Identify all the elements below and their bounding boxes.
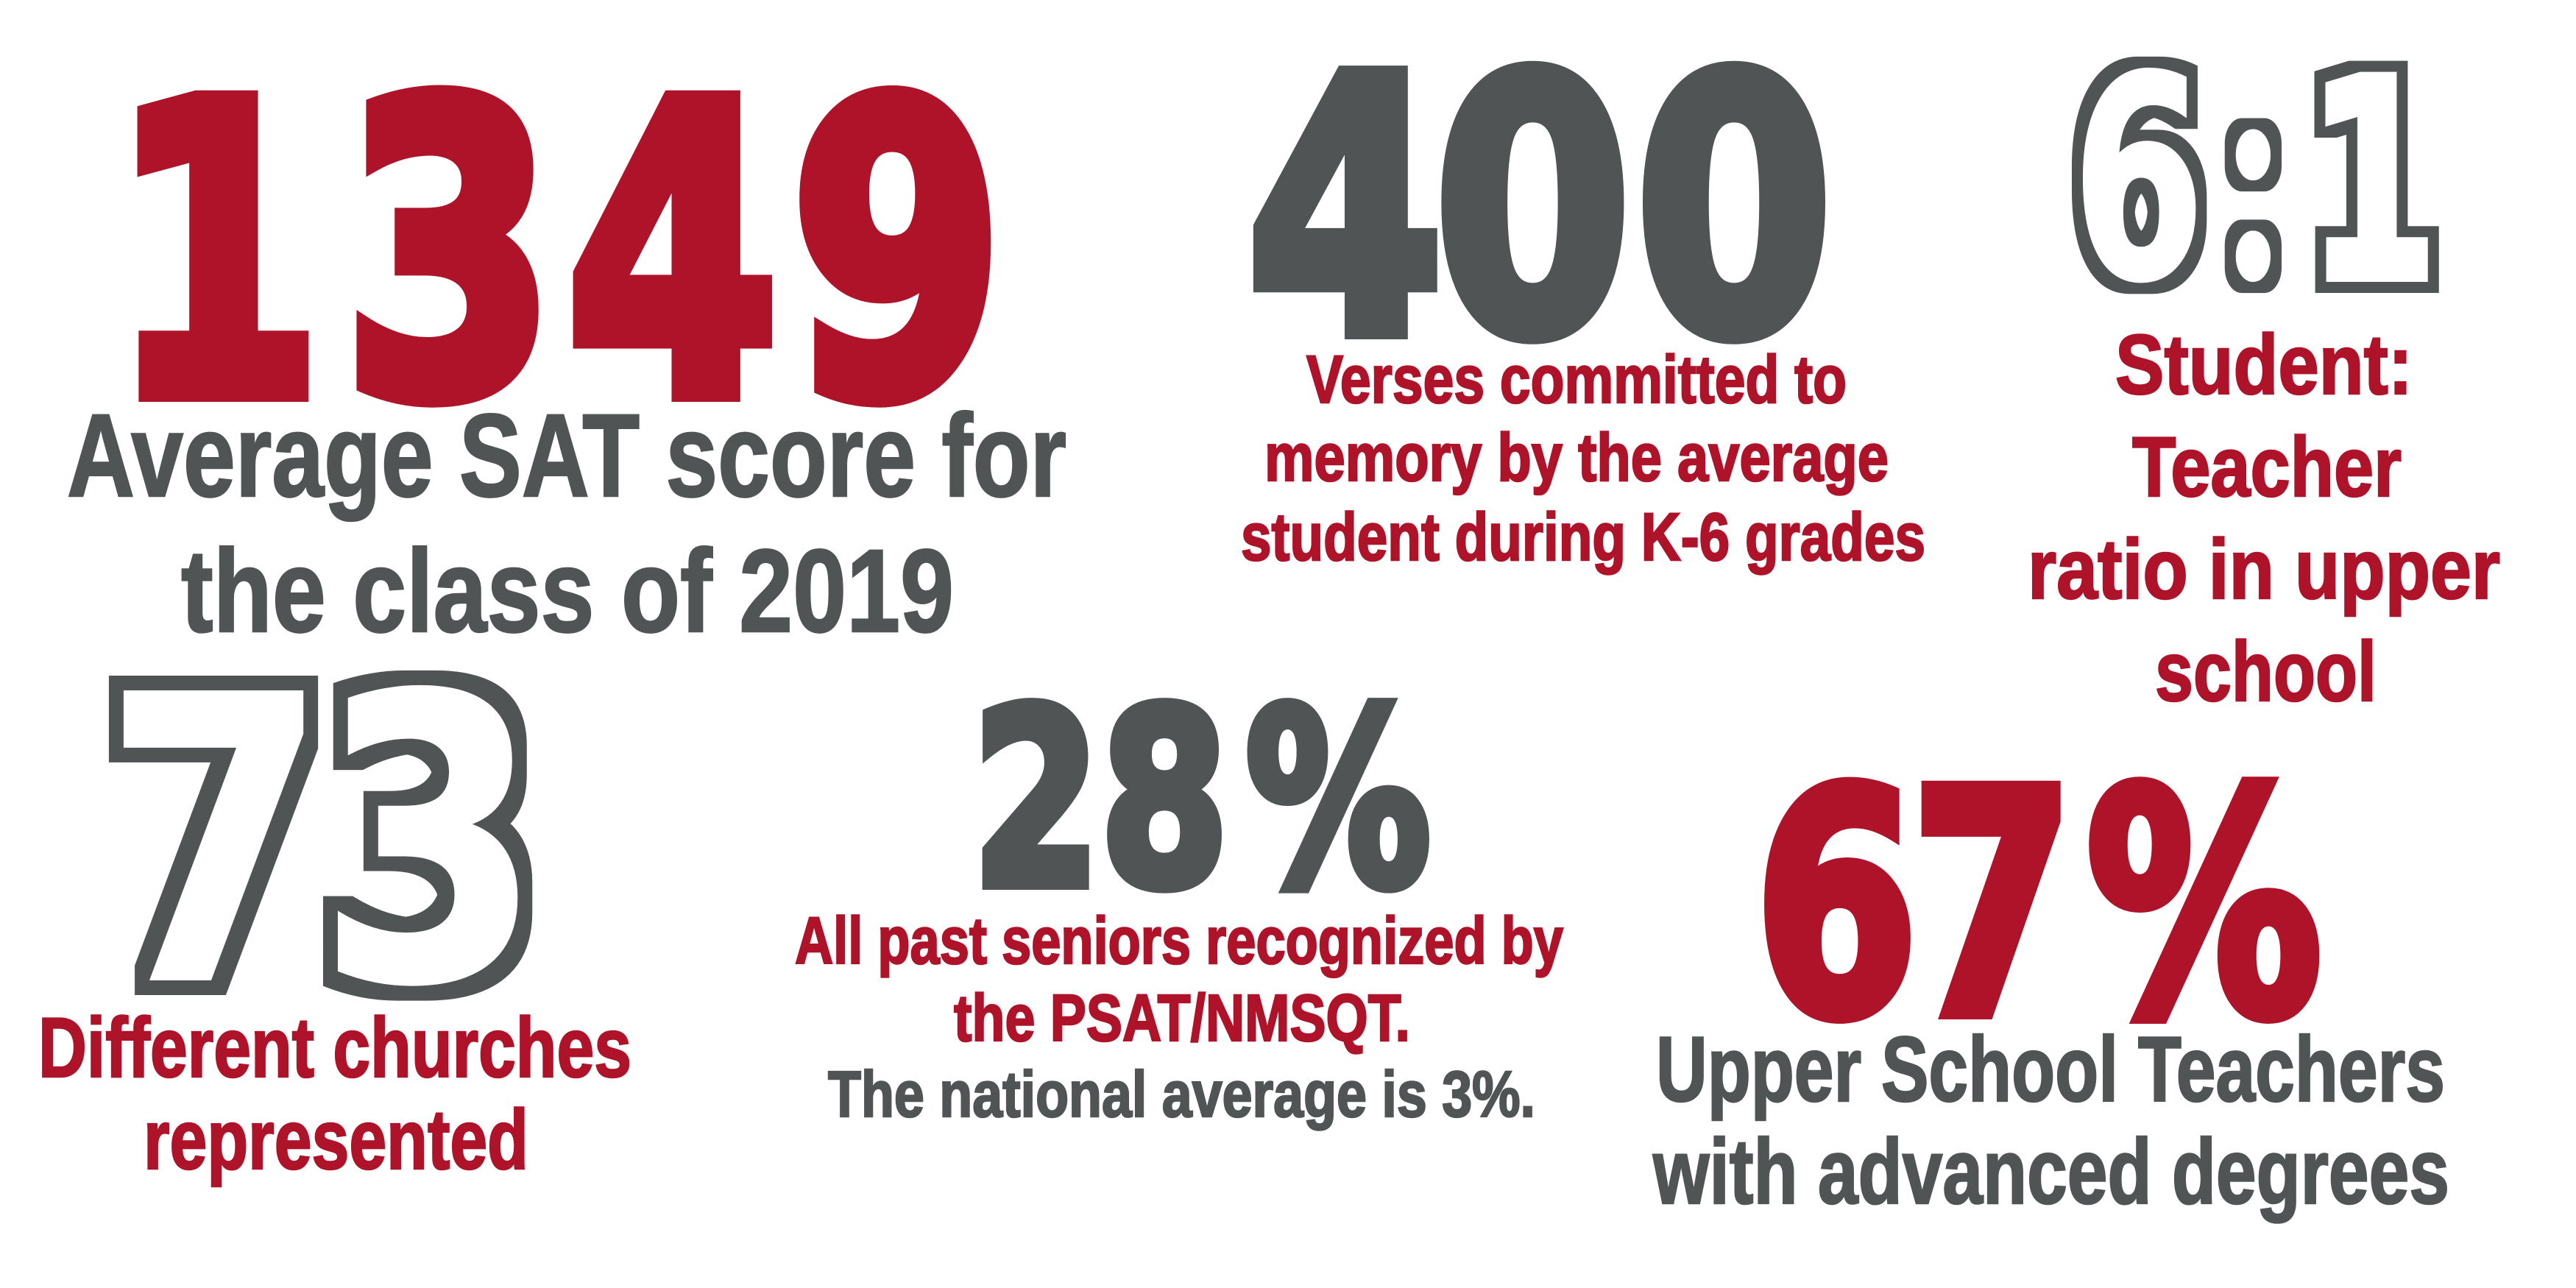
caption: student teacher ratio: Student:	[2115, 318, 2413, 412]
caption: PSAT seniors: The national average is 3%.	[828, 1058, 1535, 1130]
big outlined number: 73: 73	[103, 615, 542, 1072]
caption: verses committed to memory: student during K-6 grades	[1241, 500, 1925, 575]
panel: student teacher ratio	[2028, 0, 2500, 719]
caption: verses committed to memory	[1241, 342, 1925, 575]
panel: teachers with advanced degrees	[1652, 726, 2449, 1223]
caption: different churches	[38, 1001, 631, 1187]
panel: SAT score	[67, 21, 1066, 657]
caption: PSAT seniors	[795, 905, 1563, 1130]
panel: verses memorized	[1241, 4, 1925, 575]
big outlined number: 6:1: 6:1	[2072, 0, 2438, 347]
caption: verses committed to memory: Verses committed to	[1306, 342, 1847, 417]
caption: average SAT score	[67, 389, 1066, 657]
caption: different churches: Different churches	[38, 1001, 631, 1095]
caption: PSAT seniors: the PSAT/NMSQT.	[954, 982, 1410, 1055]
big number: 28%: 28%	[972, 659, 1431, 942]
caption: upper school teachers	[1652, 1019, 2449, 1223]
caption: student teacher ratio	[2028, 318, 2500, 719]
caption: PSAT seniors: All past seniors recognized by	[795, 905, 1563, 978]
caption: student teacher ratio: ratio in upper	[2028, 523, 2500, 617]
big number: 67%: 67%	[1755, 726, 2322, 1086]
big number: 1349: 1349	[110, 21, 1003, 487]
panel: PSAT recognition	[795, 659, 1563, 1130]
caption: different churches: represented	[144, 1093, 528, 1187]
caption: student teacher ratio: Teacher	[2132, 420, 2402, 514]
big number: 400: 400	[1247, 4, 1833, 415]
caption: average SAT score: Average SAT score for	[67, 389, 1066, 521]
caption: student teacher ratio: school	[2155, 625, 2377, 719]
caption: average SAT score: the class of 2019	[181, 525, 954, 657]
caption: verses committed to memory: memory by the average	[1264, 420, 1889, 495]
panel: churches represented	[38, 615, 631, 1187]
